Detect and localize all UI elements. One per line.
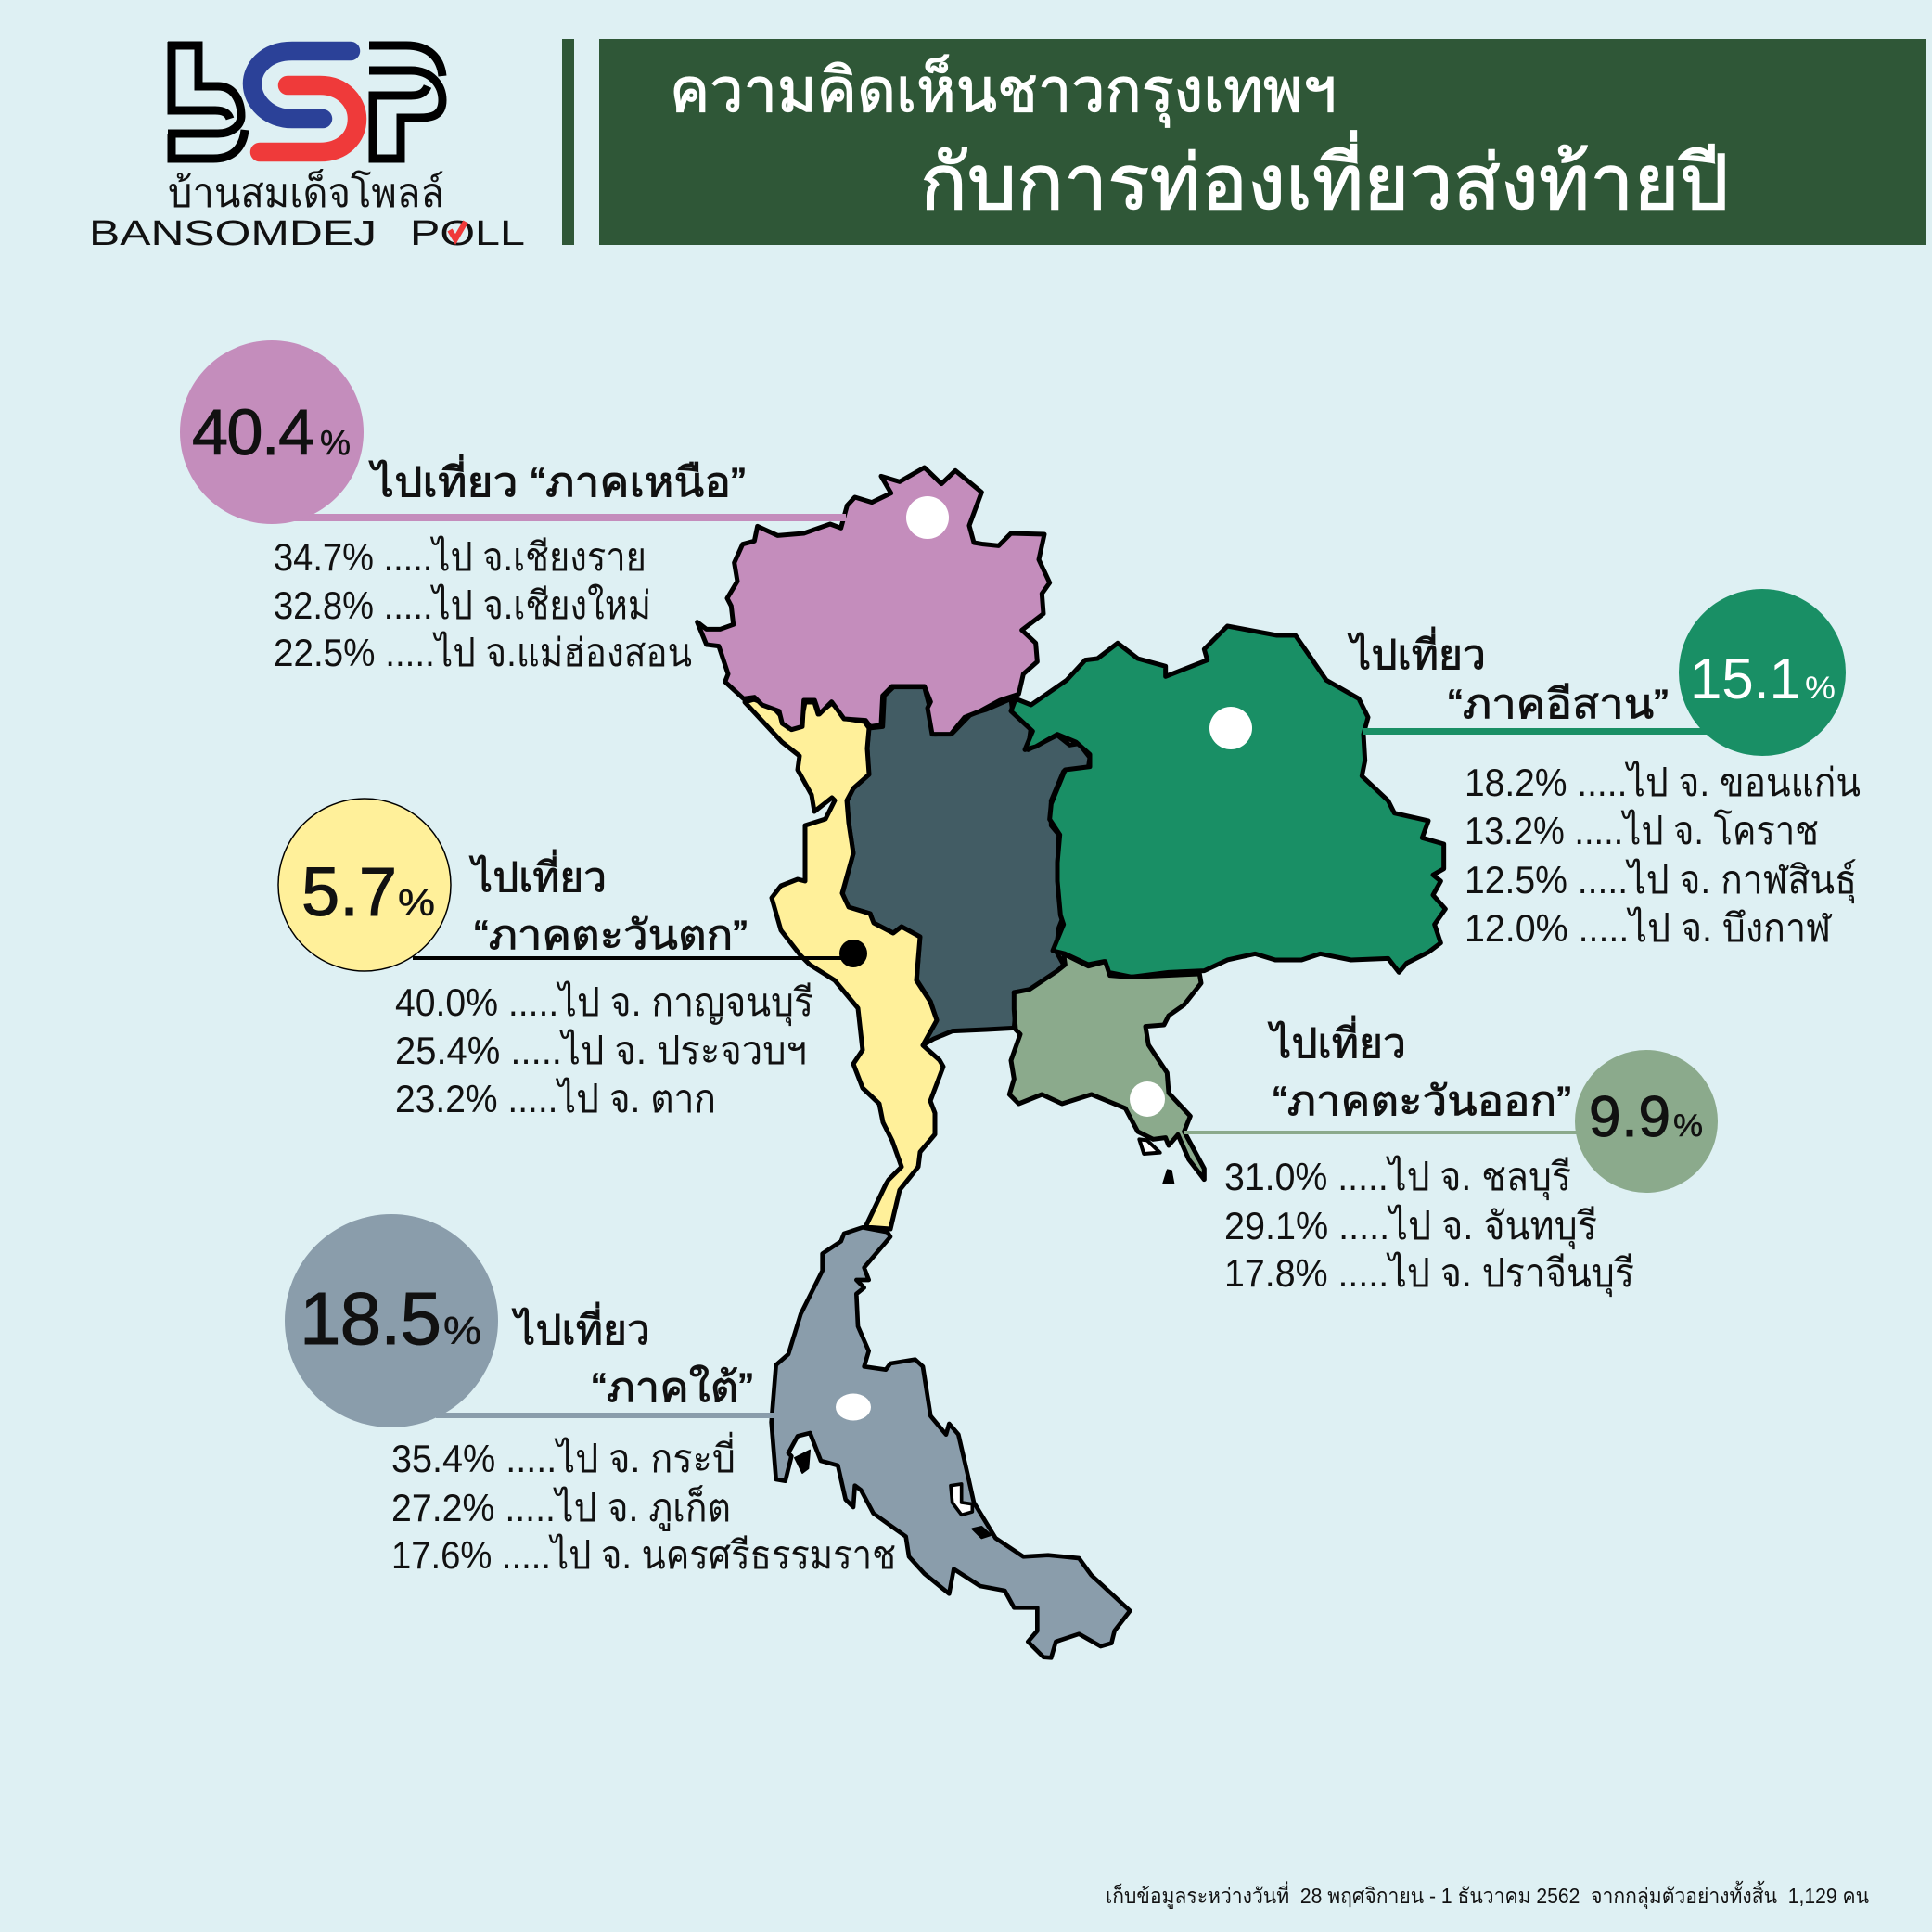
leader line xyxy=(1184,1131,1597,1134)
logo mark: BSP xyxy=(168,42,442,159)
logo: Bansomdej Poll xyxy=(89,42,525,253)
map of Thailand xyxy=(697,467,1445,1657)
percentage circle xyxy=(1679,589,1846,756)
heading line 1: ไปเที่ยว xyxy=(1268,1015,1406,1067)
provinces xyxy=(395,980,813,1120)
heading line 1: ไปเที่ยว xyxy=(1348,626,1486,678)
callout: south xyxy=(285,1214,896,1577)
logo English name xyxy=(89,214,525,253)
heading line 2: “ภาคใต้” xyxy=(592,1364,753,1411)
percent sign: % xyxy=(1673,1108,1703,1144)
heading line 1: ไปเที่ยว xyxy=(512,1301,650,1353)
provinces: 35.4% .....ไป จ. กระบี่ xyxy=(391,1432,736,1480)
percent sign: % xyxy=(320,424,351,463)
provinces: 22.5% .....ไป จ.แม่ฮ่องสอน xyxy=(274,631,692,674)
region: south xyxy=(772,1227,1130,1657)
heading line 1: ไปเที่ยว xyxy=(469,849,607,901)
percentage circle xyxy=(278,799,451,971)
value: 15.1 xyxy=(1690,647,1801,711)
dot: south xyxy=(836,1393,871,1421)
provinces: 29.1% .....ไป จ. จันทบุรี xyxy=(1224,1204,1597,1250)
value: 5.7 xyxy=(301,853,397,930)
value: 9.9 xyxy=(1589,1085,1670,1149)
region: north xyxy=(697,467,1050,735)
percentage circle xyxy=(1575,1050,1718,1193)
provinces xyxy=(1224,1155,1634,1298)
region: west xyxy=(745,699,943,1229)
provinces: 40.0% .....ไป จ. กาญจนบุรี xyxy=(395,980,813,1027)
percentage circle xyxy=(180,340,364,524)
leader line xyxy=(1363,728,1716,735)
heading line 2: “ภาคอีสาน” xyxy=(1448,682,1669,727)
leader line xyxy=(413,956,844,960)
provinces xyxy=(391,1432,896,1577)
title banner xyxy=(599,39,1926,245)
provinces: 13.2% .....ไป จ. โคราช xyxy=(1465,808,1819,852)
provinces: 34.7% .....ไป จ.เชียงราย xyxy=(274,535,646,579)
logo English name: POLL xyxy=(410,214,525,253)
provinces: 27.2% .....ไป จ. ภูเก็ต xyxy=(391,1485,731,1531)
provinces: 18.2% .....ไป จ. ขอนแก่น xyxy=(1465,761,1861,804)
footer source note: เก็บข้อมูลระหว่างวันที่ 28 พฤศจิกายน - 1 ธันวาคม 2562 จากกลุ่มตัวอย่างทั้งสิ้น 1,129 คน xyxy=(1106,1881,1869,1909)
title line 2: กับการท่องเที่ยวส่งท้ายปี xyxy=(920,130,1729,225)
dot: west xyxy=(839,940,867,967)
provinces: 12.0% .....ไป จ. บึงกาฬ xyxy=(1465,906,1832,950)
heading line 2: “ภาคตะวันออก” xyxy=(1273,1079,1571,1124)
provinces: 32.8% .....ไป จ.เชียงใหม่ xyxy=(274,583,651,627)
percent sign: % xyxy=(1805,671,1836,706)
percent sign: % xyxy=(443,1309,481,1352)
dot: north xyxy=(906,496,949,539)
region: central xyxy=(842,687,1090,1045)
icon: red check mark xyxy=(450,222,466,239)
title line 1: ความคิดเห็นชาวกรุงเทพฯ xyxy=(670,54,1337,128)
callout: north xyxy=(180,340,846,674)
value: 18.5 xyxy=(300,1277,441,1360)
percent sign: % xyxy=(398,883,435,924)
leader line xyxy=(436,1413,774,1418)
header accent bar xyxy=(562,39,574,245)
provinces: 17.6% .....ไป จ. นครศรีธรรมราช xyxy=(391,1533,896,1577)
callout: northeast xyxy=(1348,589,1861,950)
provinces: 23.2% .....ไป จ. ตาก xyxy=(395,1077,716,1120)
provinces xyxy=(274,535,692,674)
region: northeast xyxy=(1011,626,1445,977)
provinces: 12.5% .....ไป จ. กาฬสินธุ์ xyxy=(1465,858,1857,904)
value: 40.4 xyxy=(192,396,314,468)
dot: northeast xyxy=(1209,707,1252,749)
percentage circle xyxy=(285,1214,498,1427)
logo English name: BANSOMDEJ xyxy=(89,214,377,253)
provinces: 31.0% .....ไป จ. ชลบุรี xyxy=(1224,1155,1571,1201)
heading line 2: “ภาคตะวันตก” xyxy=(474,913,748,958)
region: east xyxy=(1009,953,1204,1184)
logo Thai name: บ้านสมเด็จโพลล์ xyxy=(168,169,444,216)
leader line xyxy=(278,514,846,521)
provinces xyxy=(1465,761,1861,950)
provinces: 17.8% .....ไป จ. ปราจีนบุรี xyxy=(1224,1251,1634,1298)
dot: east xyxy=(1130,1081,1165,1117)
provinces: 25.4% .....ไป จ. ประจวบฯ xyxy=(395,1029,807,1072)
callout: west xyxy=(278,799,844,1120)
heading: ไปเที่ยว “ภาคเหนือ” xyxy=(369,454,746,505)
callout: east xyxy=(1184,1015,1718,1298)
